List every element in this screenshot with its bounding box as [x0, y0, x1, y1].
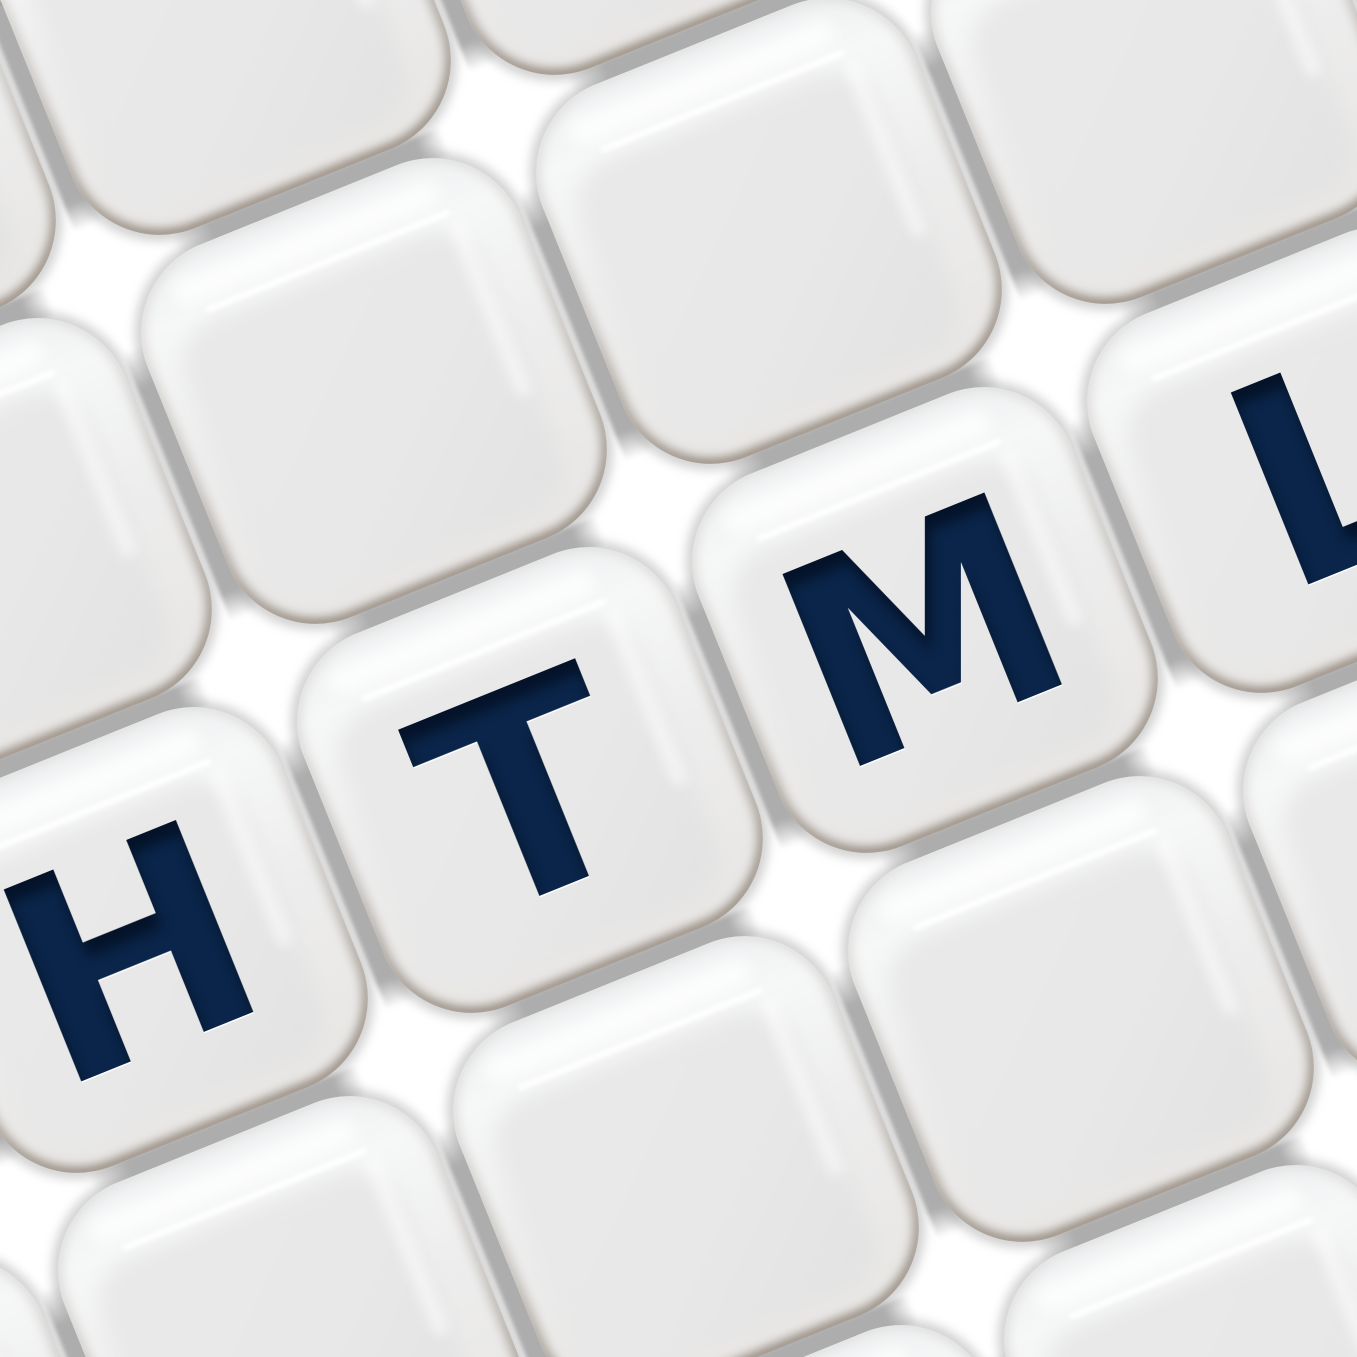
key: H — [0, 678, 397, 1202]
letter T: T — [375, 604, 680, 984]
key: T — [268, 518, 792, 1042]
blank key below M — [819, 747, 1343, 1271]
blank key top centre — [351, 0, 875, 104]
key: M — [663, 358, 1187, 882]
blank key below T — [424, 907, 948, 1357]
blank key bottom left edge — [0, 1227, 158, 1357]
letter M: M — [739, 432, 1110, 838]
blank key bottom left — [29, 1067, 553, 1357]
blank key top left edge — [0, 0, 85, 424]
blank key above M — [507, 0, 1031, 493]
blank key top left — [0, 0, 480, 264]
blank key right edge — [1214, 587, 1357, 1111]
blank key top right corner — [1297, 0, 1357, 173]
blank key top row — [0, 0, 324, 35]
blank key left edge — [0, 289, 241, 813]
key: L — [1058, 198, 1357, 722]
blank key above T — [112, 129, 636, 653]
blank key bottom centre — [580, 1296, 1104, 1357]
blank key bottom right — [975, 1136, 1357, 1357]
blank key above L — [902, 0, 1357, 333]
